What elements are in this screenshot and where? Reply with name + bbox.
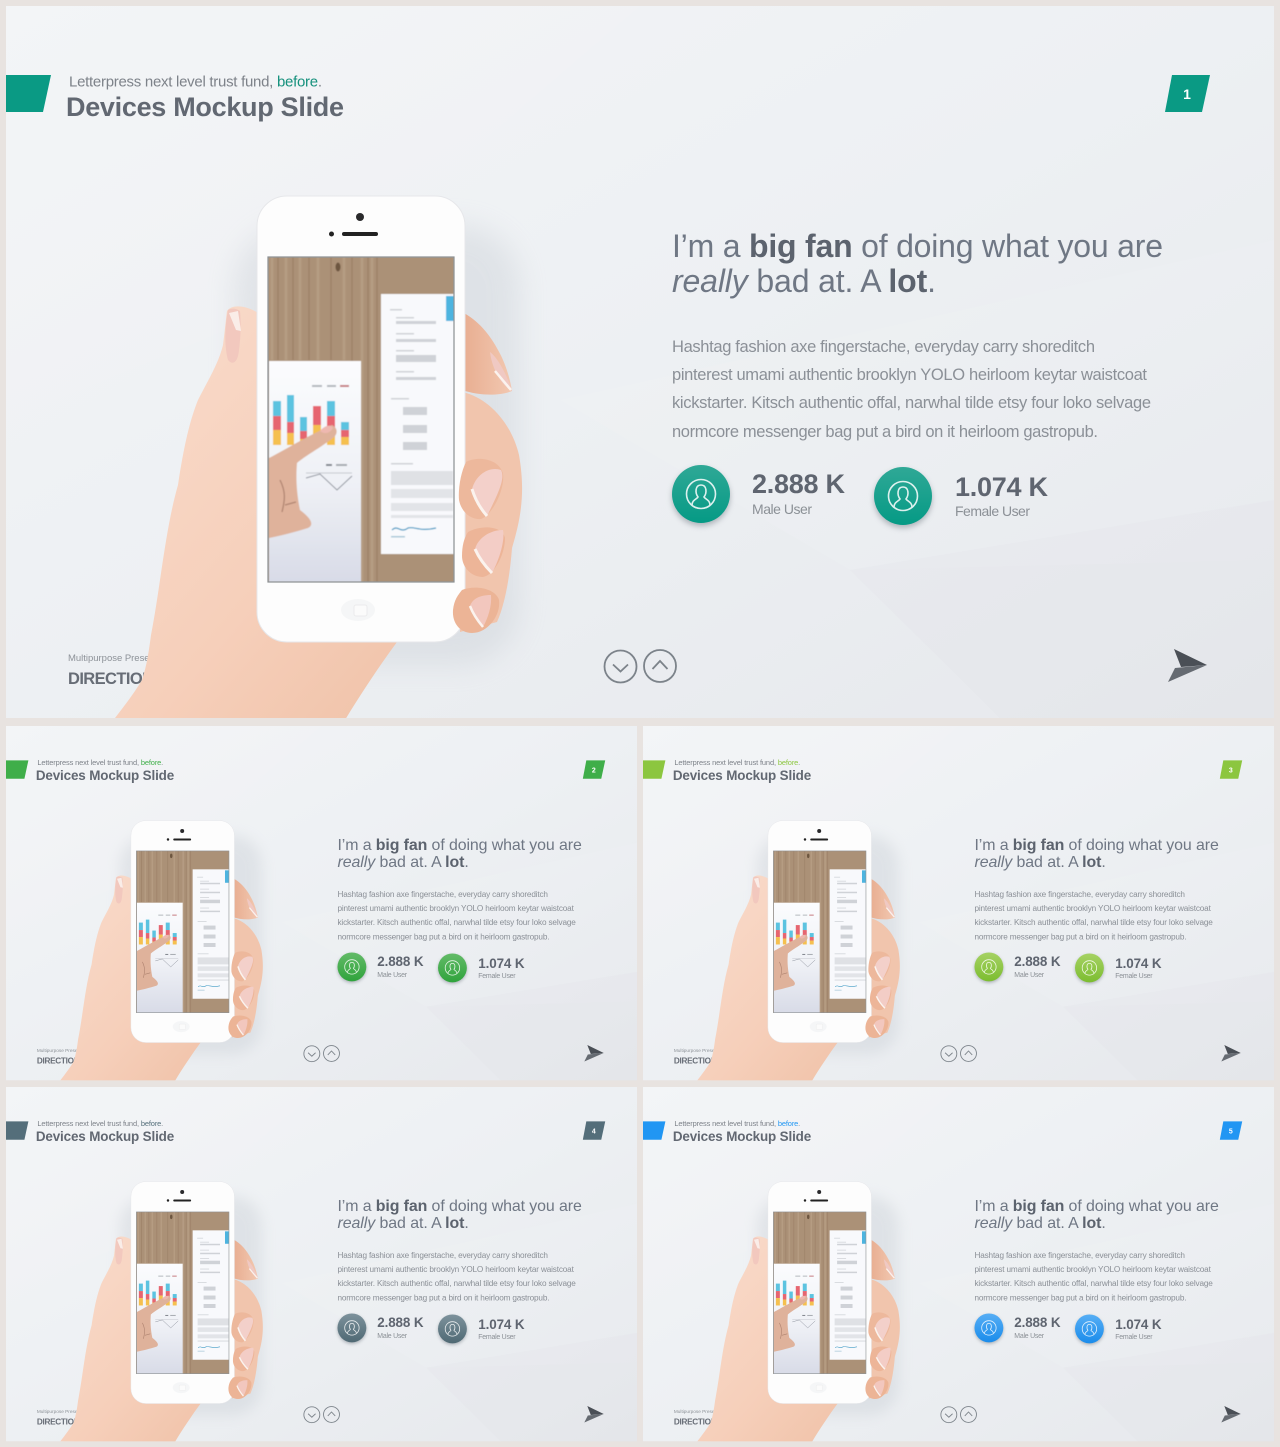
kicker text: Letterpress next level trust fund, before. — [37, 758, 163, 767]
footer brand: DIRECTION — [37, 1417, 80, 1426]
icon: paper plane — [1221, 1406, 1241, 1422]
body paragraph — [974, 890, 1213, 942]
quote heading — [974, 837, 1219, 871]
quote heading — [337, 837, 582, 871]
icon: paper plane — [1168, 649, 1207, 682]
stat: female user: Female User — [478, 1334, 516, 1341]
illustration: hand holding phone — [60, 1182, 263, 1442]
stat: male user: 2.888 K — [1014, 1315, 1061, 1330]
stat: male user — [337, 1313, 424, 1344]
body paragraph: kickstarter. Kitsch authentic offal, narwhal tilde etsy four loko selvage — [337, 1279, 576, 1288]
footer brand: Multipurpose Presentation — [674, 1048, 729, 1054]
illustration: hand holding phone — [115, 196, 522, 720]
footer brand — [68, 654, 148, 684]
quote heading: I’m a big fan of doing what you are — [337, 1198, 582, 1215]
nav arrows — [604, 650, 676, 682]
kicker text: Letterpress next level trust fund, before. — [37, 1119, 163, 1128]
slide number badge — [583, 1121, 605, 1140]
body paragraph: normcore messenger bag put a bird on it heirloom gastropub. — [672, 423, 1098, 441]
footer brand: Multipurpose Presentation — [68, 653, 178, 664]
body paragraph: Hashtag fashion axe fingerstache, everyday carry shoreditch — [337, 890, 548, 899]
stat: female user — [1075, 953, 1162, 984]
icon: light green section tag — [643, 760, 665, 779]
stat: female user: 1.074 K — [478, 1317, 525, 1332]
stat: male user: Male User — [1014, 1333, 1045, 1340]
quote heading — [672, 228, 1163, 299]
slide number badge — [1165, 75, 1210, 112]
stat: female user — [874, 467, 1048, 528]
footer brand — [37, 1409, 92, 1426]
body paragraph — [974, 1251, 1213, 1303]
body paragraph: pinterest umami authentic brooklyn YOLO heirloom keytar waistcoat — [974, 1265, 1212, 1274]
nav arrows — [304, 1407, 339, 1423]
nav arrows — [304, 1046, 339, 1062]
slide number badge — [583, 760, 605, 779]
body paragraph: kickstarter. Kitsch authentic offal, narwhal tilde etsy four loko selvage — [672, 394, 1151, 412]
body paragraph — [337, 1251, 576, 1303]
stat: male user — [974, 952, 1061, 983]
stat: male user: 2.888 K — [377, 954, 424, 969]
stat: male user: Male User — [1014, 972, 1045, 979]
body paragraph: Hashtag fashion axe fingerstache, everyday carry shoreditch — [974, 890, 1185, 899]
quote heading: really bad at. A lot. — [974, 1215, 1106, 1232]
quote heading: really bad at. A lot. — [337, 1215, 469, 1232]
footer brand: DIRECTION — [37, 1056, 80, 1065]
title: Devices Mockup Slide — [36, 768, 174, 783]
slide number badge: 4 — [592, 1128, 596, 1135]
footer brand: Multipurpose Presentation — [674, 1409, 729, 1415]
icon: paper plane — [584, 1406, 604, 1422]
footer brand — [674, 1409, 729, 1426]
icon: teal section tag — [6, 75, 51, 112]
quote heading: really bad at. A lot. — [337, 854, 469, 871]
body paragraph — [672, 338, 1151, 441]
panel: slide 2 (green) — [6, 726, 637, 1081]
quote heading: I’m a big fan of doing what you are — [974, 837, 1219, 854]
body paragraph: normcore messenger bag put a bird on it heirloom gastropub. — [974, 933, 1186, 942]
stat: female user — [438, 953, 525, 984]
body paragraph: normcore messenger bag put a bird on it heirloom gastropub. — [974, 1294, 1186, 1303]
stat: male user: Male User — [377, 1333, 408, 1340]
icon: slate section tag — [6, 1121, 28, 1140]
footer brand: Multipurpose Presentation — [37, 1409, 92, 1415]
footer brand — [37, 1048, 76, 1064]
slide number badge — [1220, 1121, 1242, 1140]
body paragraph: Hashtag fashion axe fingerstache, everyday carry shoreditch — [974, 1251, 1185, 1260]
kicker text: Letterpress next level trust fund, before. — [69, 74, 322, 90]
stat: male user: 2.888 K — [752, 469, 846, 499]
icon: green section tag — [6, 760, 28, 779]
stat: male user: Male User — [377, 972, 408, 979]
quote heading: I’m a big fan of doing what you are — [672, 228, 1163, 264]
illustration: hand holding phone — [60, 821, 263, 1081]
stat: female user: Female User — [1115, 1334, 1153, 1341]
body paragraph: Hashtag fashion axe fingerstache, everyday carry shoreditch — [672, 338, 1095, 356]
panel: slide 5 (blue) — [643, 1087, 1274, 1442]
footer brand: DIRECTION — [674, 1417, 717, 1426]
nav arrows — [941, 1407, 976, 1423]
slide number badge — [1220, 760, 1242, 779]
nav arrows — [941, 1046, 976, 1062]
body paragraph — [337, 890, 576, 942]
quote heading: really bad at. A lot. — [672, 263, 936, 299]
icon: paper plane — [584, 1045, 604, 1061]
panel: slide 1 (teal) — [6, 6, 1274, 720]
stat: female user: Female User — [955, 503, 1030, 519]
footer brand: DIRECTION — [68, 670, 154, 688]
illustration: hand holding phone — [697, 1182, 900, 1442]
slide number badge: 3 — [1229, 767, 1233, 774]
footer brand: Multipurpose Presentation — [37, 1048, 92, 1054]
title: Devices Mockup Slide — [673, 768, 811, 783]
panel: slide 4 (slate) — [6, 1087, 637, 1442]
body paragraph: pinterest umami authentic brooklyn YOLO heirloom keytar waistcoat — [974, 904, 1212, 913]
slide number badge: 1 — [1183, 86, 1191, 102]
title: Devices Mockup Slide — [66, 92, 344, 122]
body paragraph: pinterest umami authentic brooklyn YOLO heirloom keytar waistcoat — [337, 904, 575, 913]
icon: blue section tag — [643, 1121, 665, 1140]
stat: female user: 1.074 K — [1115, 956, 1162, 971]
quote heading: I’m a big fan of doing what you are — [974, 1198, 1219, 1215]
stat: male user: 2.888 K — [1014, 954, 1061, 969]
body paragraph: pinterest umami authentic brooklyn YOLO heirloom keytar waistcoat — [337, 1265, 575, 1274]
body paragraph: kickstarter. Kitsch authentic offal, narwhal tilde etsy four loko selvage — [337, 918, 576, 927]
stat: male user — [672, 465, 846, 526]
quote heading — [974, 1198, 1219, 1232]
stat: female user — [438, 1314, 525, 1345]
stat: female user: 1.074 K — [1115, 1317, 1162, 1332]
footer brand — [674, 1048, 714, 1064]
footer brand: DIRECTION — [674, 1056, 717, 1065]
stat: female user — [1075, 1314, 1162, 1345]
stat: female user: 1.074 K — [478, 956, 525, 971]
kicker text: Letterpress next level trust fund, before. — [674, 1119, 800, 1128]
stat: female user: Female User — [1115, 973, 1153, 980]
kicker text: Letterpress next level trust fund, before. — [674, 758, 800, 767]
body paragraph: normcore messenger bag put a bird on it heirloom gastropub. — [337, 933, 549, 942]
quote heading — [337, 1198, 582, 1232]
illustration: hand holding phone — [697, 821, 900, 1081]
icon: paper plane — [1221, 1045, 1241, 1061]
panel: slide 3 (light green) — [643, 726, 1274, 1081]
title: Devices Mockup Slide — [673, 1129, 811, 1144]
slide number badge: 5 — [1229, 1128, 1233, 1135]
body paragraph: kickstarter. Kitsch authentic offal, narwhal tilde etsy four loko selvage — [974, 1279, 1213, 1288]
stat: female user: 1.074 K — [955, 472, 1048, 502]
body paragraph: normcore messenger bag put a bird on it heirloom gastropub. — [337, 1294, 549, 1303]
body paragraph: kickstarter. Kitsch authentic offal, narwhal tilde etsy four loko selvage — [974, 918, 1213, 927]
title: Devices Mockup Slide — [36, 1129, 174, 1144]
body paragraph: Hashtag fashion axe fingerstache, everyday carry shoreditch — [337, 1251, 548, 1260]
stat: male user — [337, 952, 424, 983]
slide number badge: 2 — [592, 767, 596, 774]
quote heading: I’m a big fan of doing what you are — [337, 837, 582, 854]
quote heading: really bad at. A lot. — [974, 854, 1106, 871]
stat: male user: Male User — [752, 501, 812, 517]
stat: female user: Female User — [478, 973, 516, 980]
stat: male user — [974, 1313, 1061, 1344]
body paragraph: pinterest umami authentic brooklyn YOLO heirloom keytar waistcoat — [672, 366, 1147, 384]
stat: male user: 2.888 K — [377, 1315, 424, 1330]
